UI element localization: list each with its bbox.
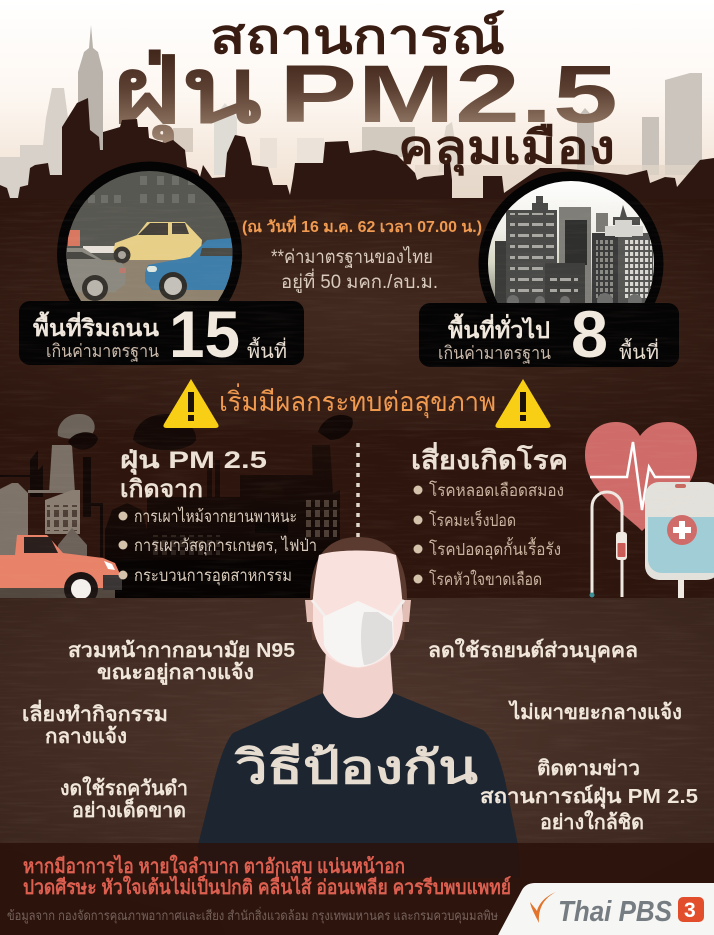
standard note: **ค่ามาตรฐานของไทย: [271, 246, 433, 268]
trousers: [205, 875, 515, 935]
logo channel 3: [678, 897, 704, 922]
tips: right: ติดตามข่าว: [537, 757, 640, 780]
person with mask: [198, 537, 520, 935]
dotted divider: [356, 443, 360, 538]
icon: iv drip: [590, 482, 714, 598]
tips: right: [428, 638, 698, 834]
tips: left: ขณะอยู่กลางแจ้ง: [97, 661, 254, 686]
icon: orange pickup truck: [0, 535, 122, 606]
smoke clouds: [133, 414, 196, 450]
shirt: [198, 693, 520, 878]
title line 2: ฝุ่น: [112, 40, 262, 148]
warning symptoms text: [23, 854, 511, 899]
list: causes: การเผาไหม้จากยานพาหนะ: [134, 506, 297, 526]
list: causes: กระบวนการอุตสาหกรรม: [134, 566, 292, 586]
label: roadside areas: พื้นที่: [247, 337, 287, 363]
list: diseases: โรคปอดอุดกั้นเรื้อรัง: [429, 537, 561, 560]
warning symptoms text: หากมีอาการไอ หายใจลำบาก ตาอักเสบ แน่นหน้าอก: [23, 854, 405, 878]
ears: [305, 600, 411, 622]
date note: (ณ วันที่ 16 ม.ค. 62 เวลา 07.00 น.): [242, 215, 482, 236]
warning symptoms text: ปวดศีรษะ หัวใจเต้นไม่เป็นปกติ คลื่นไส้ อ่อนเพลีย ควรรีบพบแพทย์: [23, 872, 511, 899]
heading: causes: เกิดจาก: [120, 476, 203, 503]
list: causes: [118, 506, 317, 586]
grey car: [60, 248, 126, 301]
title line 1: สถานการณ์: [210, 10, 505, 64]
band: causes and risks background: [0, 430, 714, 598]
heading: disease risks: เสี่ยงเกิดโรค: [411, 441, 568, 475]
yellow car: [113, 222, 202, 264]
label: roadside areas: 15: [169, 297, 240, 371]
standard note: อยู่ที่ 50 มคก./ลบ.ม.: [281, 268, 438, 293]
list: diseases: โรคหลอดเลือดสมอง: [429, 480, 564, 500]
icon: city buildings circle: [478, 172, 664, 303]
streak texture: [0, 200, 714, 850]
tips: right: สถานการณ์ฝุ่น PM 2.5: [480, 784, 698, 809]
tips: right: อย่างใกล้ชิด: [540, 810, 644, 834]
label: general areas: 8: [571, 297, 608, 371]
grey smoke: [58, 414, 95, 439]
sky background: [0, 0, 714, 215]
right factory group: [105, 445, 345, 598]
label: roadside areas: เกินค่ามาตรฐาน: [46, 341, 159, 362]
title line 2: PM2.5: [279, 49, 618, 140]
shirt label: วิธีป้องกัน: [234, 741, 479, 793]
title line 2: [112, 40, 618, 148]
heading: causes: [120, 447, 267, 503]
source note: ข้อมูลจาก กองจัดการคุณภาพอากาศและเสียง สำนักสิ่งแวดล้อม กรุงเทพมหานคร และกรมควบคุมมลพิษ: [7, 907, 498, 924]
label: roadside areas: [19, 297, 304, 371]
logo wordmark: Thai PBS: [558, 896, 673, 928]
tips: right: ลดใช้รถยนต์ส่วนบุคคล: [428, 638, 638, 663]
title line 3: คลุมเมือง: [398, 121, 615, 176]
mask: [323, 601, 394, 667]
brown background of upper section: [0, 199, 714, 430]
warning heading: [163, 379, 551, 428]
grey tank: [0, 483, 28, 556]
bottom overlay: [0, 843, 714, 935]
logo channel 3: 3: [684, 899, 696, 922]
logo mark: [530, 892, 556, 923]
hair and head: [310, 537, 407, 640]
neck: [323, 650, 393, 718]
tips: left: [22, 639, 295, 822]
label: general areas: พื้นที่ทั่วไป: [448, 313, 550, 343]
left factory lattice: [0, 450, 103, 557]
heading text: เริ่มมีผลกระทบต่อสุขภาพ: [219, 383, 496, 419]
grey chimney: [49, 445, 75, 493]
list: causes: การเผาวัสดุการเกษตร, ไฟป่า: [134, 535, 317, 556]
tips: right: ไม่เผาขยะกลางแจ้ง: [508, 700, 682, 724]
icon: warning triangle left: [163, 379, 219, 428]
list: diseases: [414, 480, 564, 589]
list: diseases: โรคหัวใจขาดเลือด: [429, 569, 542, 589]
tips: left: งดใช้รถควันดำ: [60, 776, 188, 800]
heading: causes: ฝุ่น PM 2.5: [120, 447, 267, 476]
tips: left: อย่างเด็ดขาด: [72, 796, 186, 822]
blue car: [145, 238, 233, 300]
band: prevention background: [0, 598, 714, 935]
ear loops: [312, 600, 404, 620]
grey building: [45, 490, 80, 534]
icon: heart with pulse: [585, 422, 697, 531]
logo: Thai PBS: [498, 883, 714, 935]
label: roadside areas: พื้นที่ริมถนน: [33, 311, 159, 341]
tips: left: สวมหน้ากากอนามัย N95: [68, 639, 295, 662]
icon: roadside traffic circle: [57, 162, 242, 301]
label: general areas: เกินค่ามาตรฐาน: [438, 343, 551, 364]
list: diseases: โรคมะเร็งปอด: [429, 509, 516, 530]
icon: warning triangle right: [495, 379, 551, 428]
label: general areas: [419, 297, 679, 371]
factories silhouette: [0, 414, 353, 598]
tips: left: เลี่ยงทำกิจกรรม: [22, 699, 168, 726]
tips: left: กลางแจ้ง: [45, 725, 127, 748]
standard note: [271, 246, 438, 293]
background hazy skyline: [0, 25, 705, 200]
label: general areas: พื้นที่: [619, 338, 659, 364]
